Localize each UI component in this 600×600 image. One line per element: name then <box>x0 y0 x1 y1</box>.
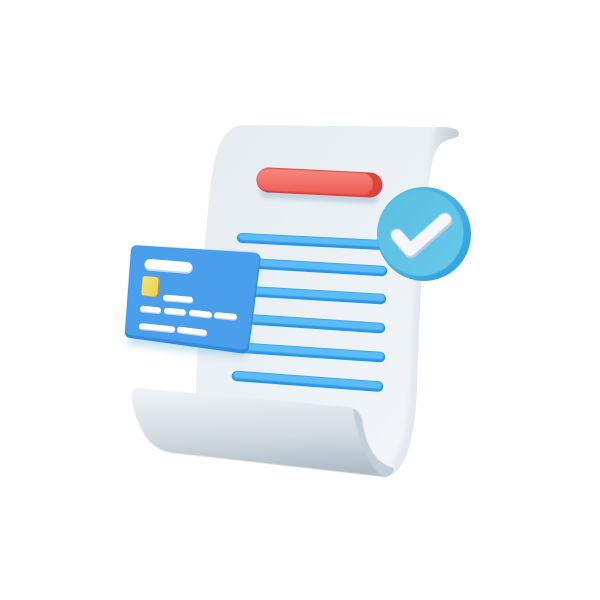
text lines: blue <box>237 237 382 386</box>
line 6 <box>237 375 378 386</box>
card name strip <box>150 264 187 268</box>
curl inner fold <box>353 409 393 477</box>
sheet body <box>196 125 459 477</box>
line 4 <box>245 318 380 328</box>
credit card <box>125 246 261 358</box>
check mark <box>397 219 446 252</box>
sheet edge shading <box>392 125 461 476</box>
line 5 <box>245 347 380 357</box>
line 1 <box>242 237 382 245</box>
card number lines <box>142 298 234 333</box>
illustration: receipt with card and check badge <box>124 125 471 478</box>
check badge <box>377 187 471 281</box>
bottom curl of receipt <box>132 388 394 477</box>
line 3 <box>245 290 381 299</box>
paper sheet <box>196 125 461 477</box>
heading bar: red <box>266 180 372 198</box>
line 2 <box>245 262 382 271</box>
card chip <box>141 276 160 298</box>
